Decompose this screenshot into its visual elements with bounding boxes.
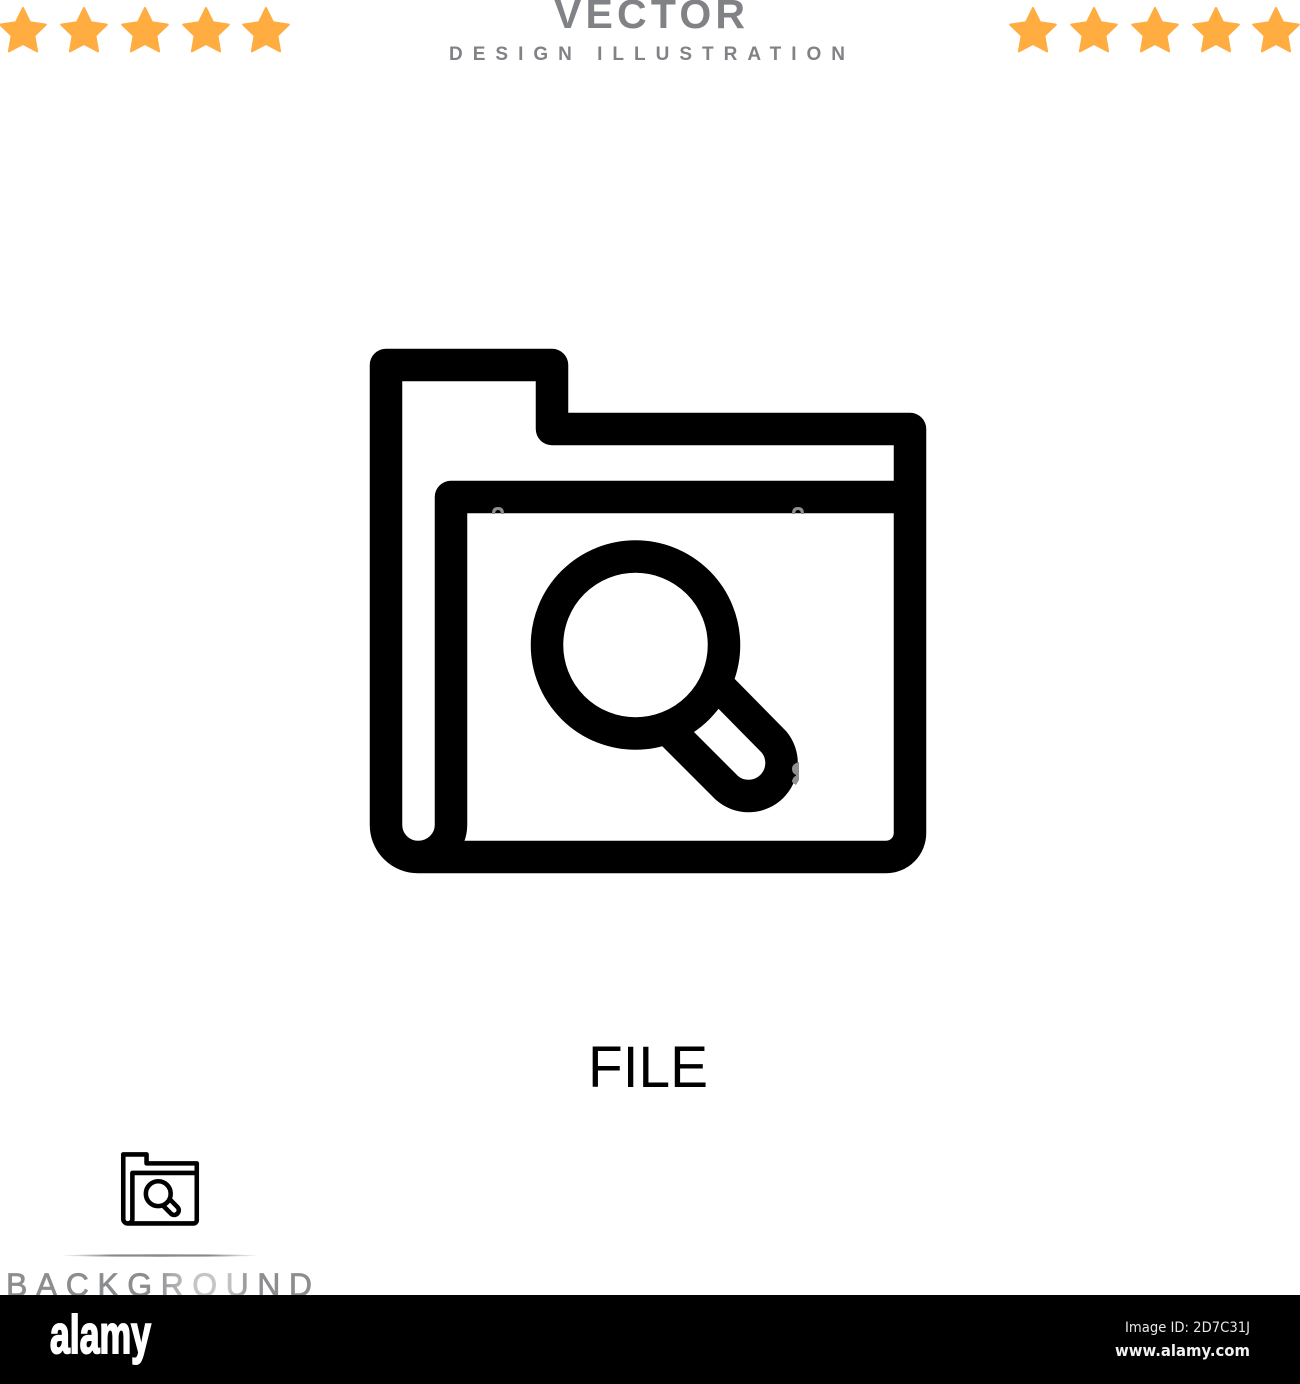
folder outline bbox=[386, 365, 910, 857]
logo: alamy: alamy bbox=[50, 1305, 151, 1365]
left star rating bbox=[0, 8, 289, 51]
subheading: design illustration: DESIGN ILLUSTRATION bbox=[449, 44, 845, 65]
watermark fragments bbox=[492, 507, 804, 785]
right star rating bbox=[1010, 8, 1299, 51]
divider line bbox=[60, 1254, 260, 1257]
footer bar bbox=[0, 1295, 1300, 1384]
magnifier lens bbox=[547, 556, 724, 734]
website: www.alamy.com bbox=[1115, 1341, 1250, 1360]
image id: Image ID: 2D7C31J bbox=[1125, 1320, 1250, 1336]
icon: folder with magnifying glass bbox=[386, 365, 910, 857]
title: file: FILE bbox=[588, 1035, 708, 1100]
small icon: folder with magnifying glass bbox=[123, 1154, 197, 1223]
label: background: BACKGROUND bbox=[6, 1267, 312, 1303]
magnifier handle bbox=[662, 675, 782, 796]
